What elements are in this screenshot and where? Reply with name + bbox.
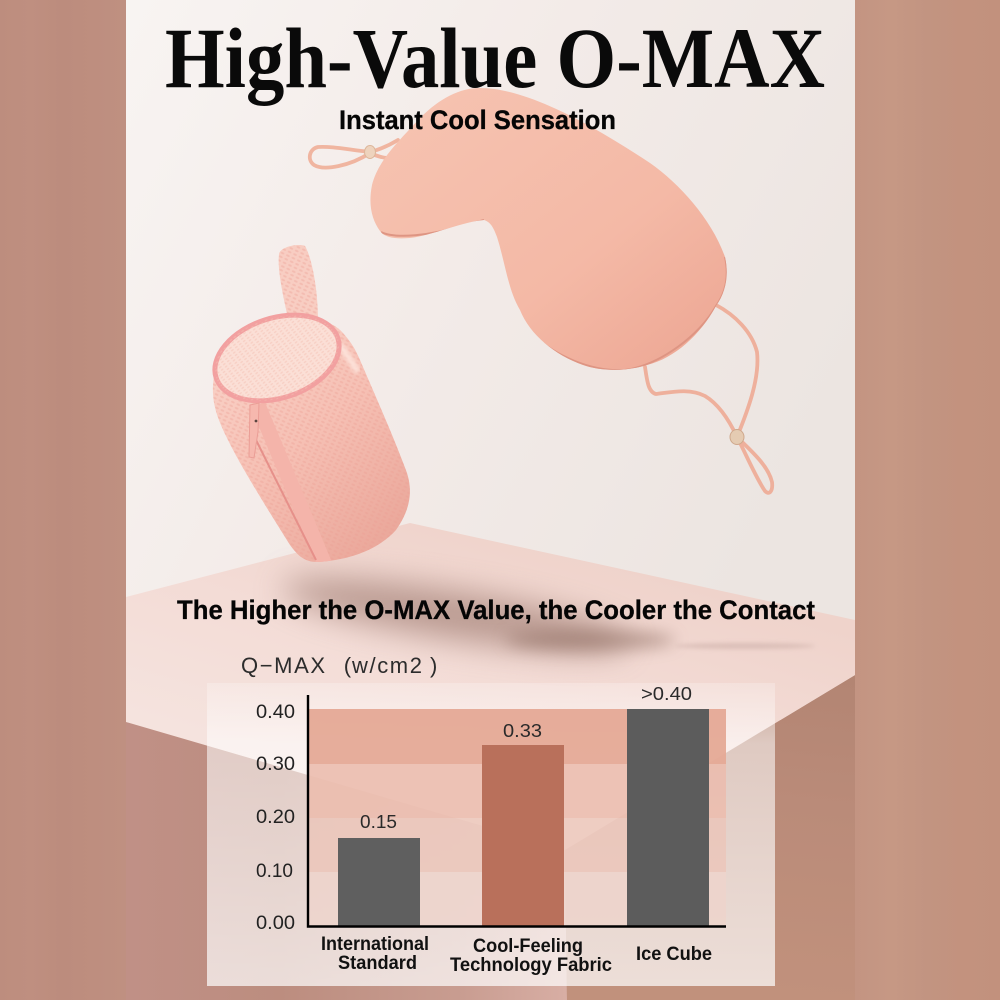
y axis labels: 0.20 [256, 807, 295, 828]
category labels: Technology Fabric [450, 955, 612, 976]
bar: International Standard [338, 838, 420, 926]
bar: Cool-Feeling Technology Fabric [482, 745, 564, 926]
pouch lid [204, 300, 350, 416]
chart unit label: w/cm2 [351, 653, 424, 678]
category labels [321, 934, 712, 976]
background bands [309, 709, 726, 926]
category labels: International [321, 934, 429, 955]
value labels: >0.40 [641, 684, 692, 704]
axes [308, 695, 726, 926]
subtitle: Instant Cool Sensation [339, 105, 616, 135]
panel: central scene [126, 0, 855, 1000]
platform left face [354, 928, 567, 1000]
chart unit label: ( [336, 653, 353, 678]
y axis labels [256, 702, 295, 934]
left strap loop [310, 140, 398, 168]
value labels: 0.15 [360, 812, 397, 832]
right bead [730, 430, 744, 444]
right straps [645, 305, 772, 493]
y axis labels: 0.10 [256, 861, 293, 882]
pouch handle [279, 245, 318, 320]
bar chart [256, 684, 726, 976]
category labels: Standard [338, 953, 417, 974]
mask body [370, 88, 727, 370]
icon: mesh zip pouch [204, 245, 410, 565]
y axis labels: 0.30 [256, 754, 295, 775]
category labels: Ice Cube [636, 944, 712, 965]
zipper band [256, 345, 358, 565]
panel: chart backing [207, 683, 775, 986]
category labels: Cool-Feeling [473, 936, 583, 957]
platform right face [565, 675, 855, 1000]
left bead [364, 146, 376, 158]
value labels: 0.33 [503, 721, 542, 741]
chart unit label: ) [430, 653, 439, 678]
mask piping [381, 220, 727, 370]
back wall [126, 0, 855, 720]
pouch body [213, 316, 410, 562]
title: High-Value O-MAX [165, 10, 825, 106]
cast shadow [278, 564, 815, 666]
heading: chart headline: The Higher the O-MAX Value, the Cooler the Contact [177, 595, 815, 625]
chart unit label: Q−MAX [241, 653, 327, 678]
bar: Ice Cube [627, 709, 709, 926]
y axis labels: 0.40 [256, 702, 295, 723]
icon: silk eye mask with straps [310, 88, 772, 493]
value labels [360, 684, 692, 832]
y axis labels: 0.00 [256, 913, 295, 934]
platform top face [126, 523, 855, 775]
zip pull [249, 403, 259, 458]
